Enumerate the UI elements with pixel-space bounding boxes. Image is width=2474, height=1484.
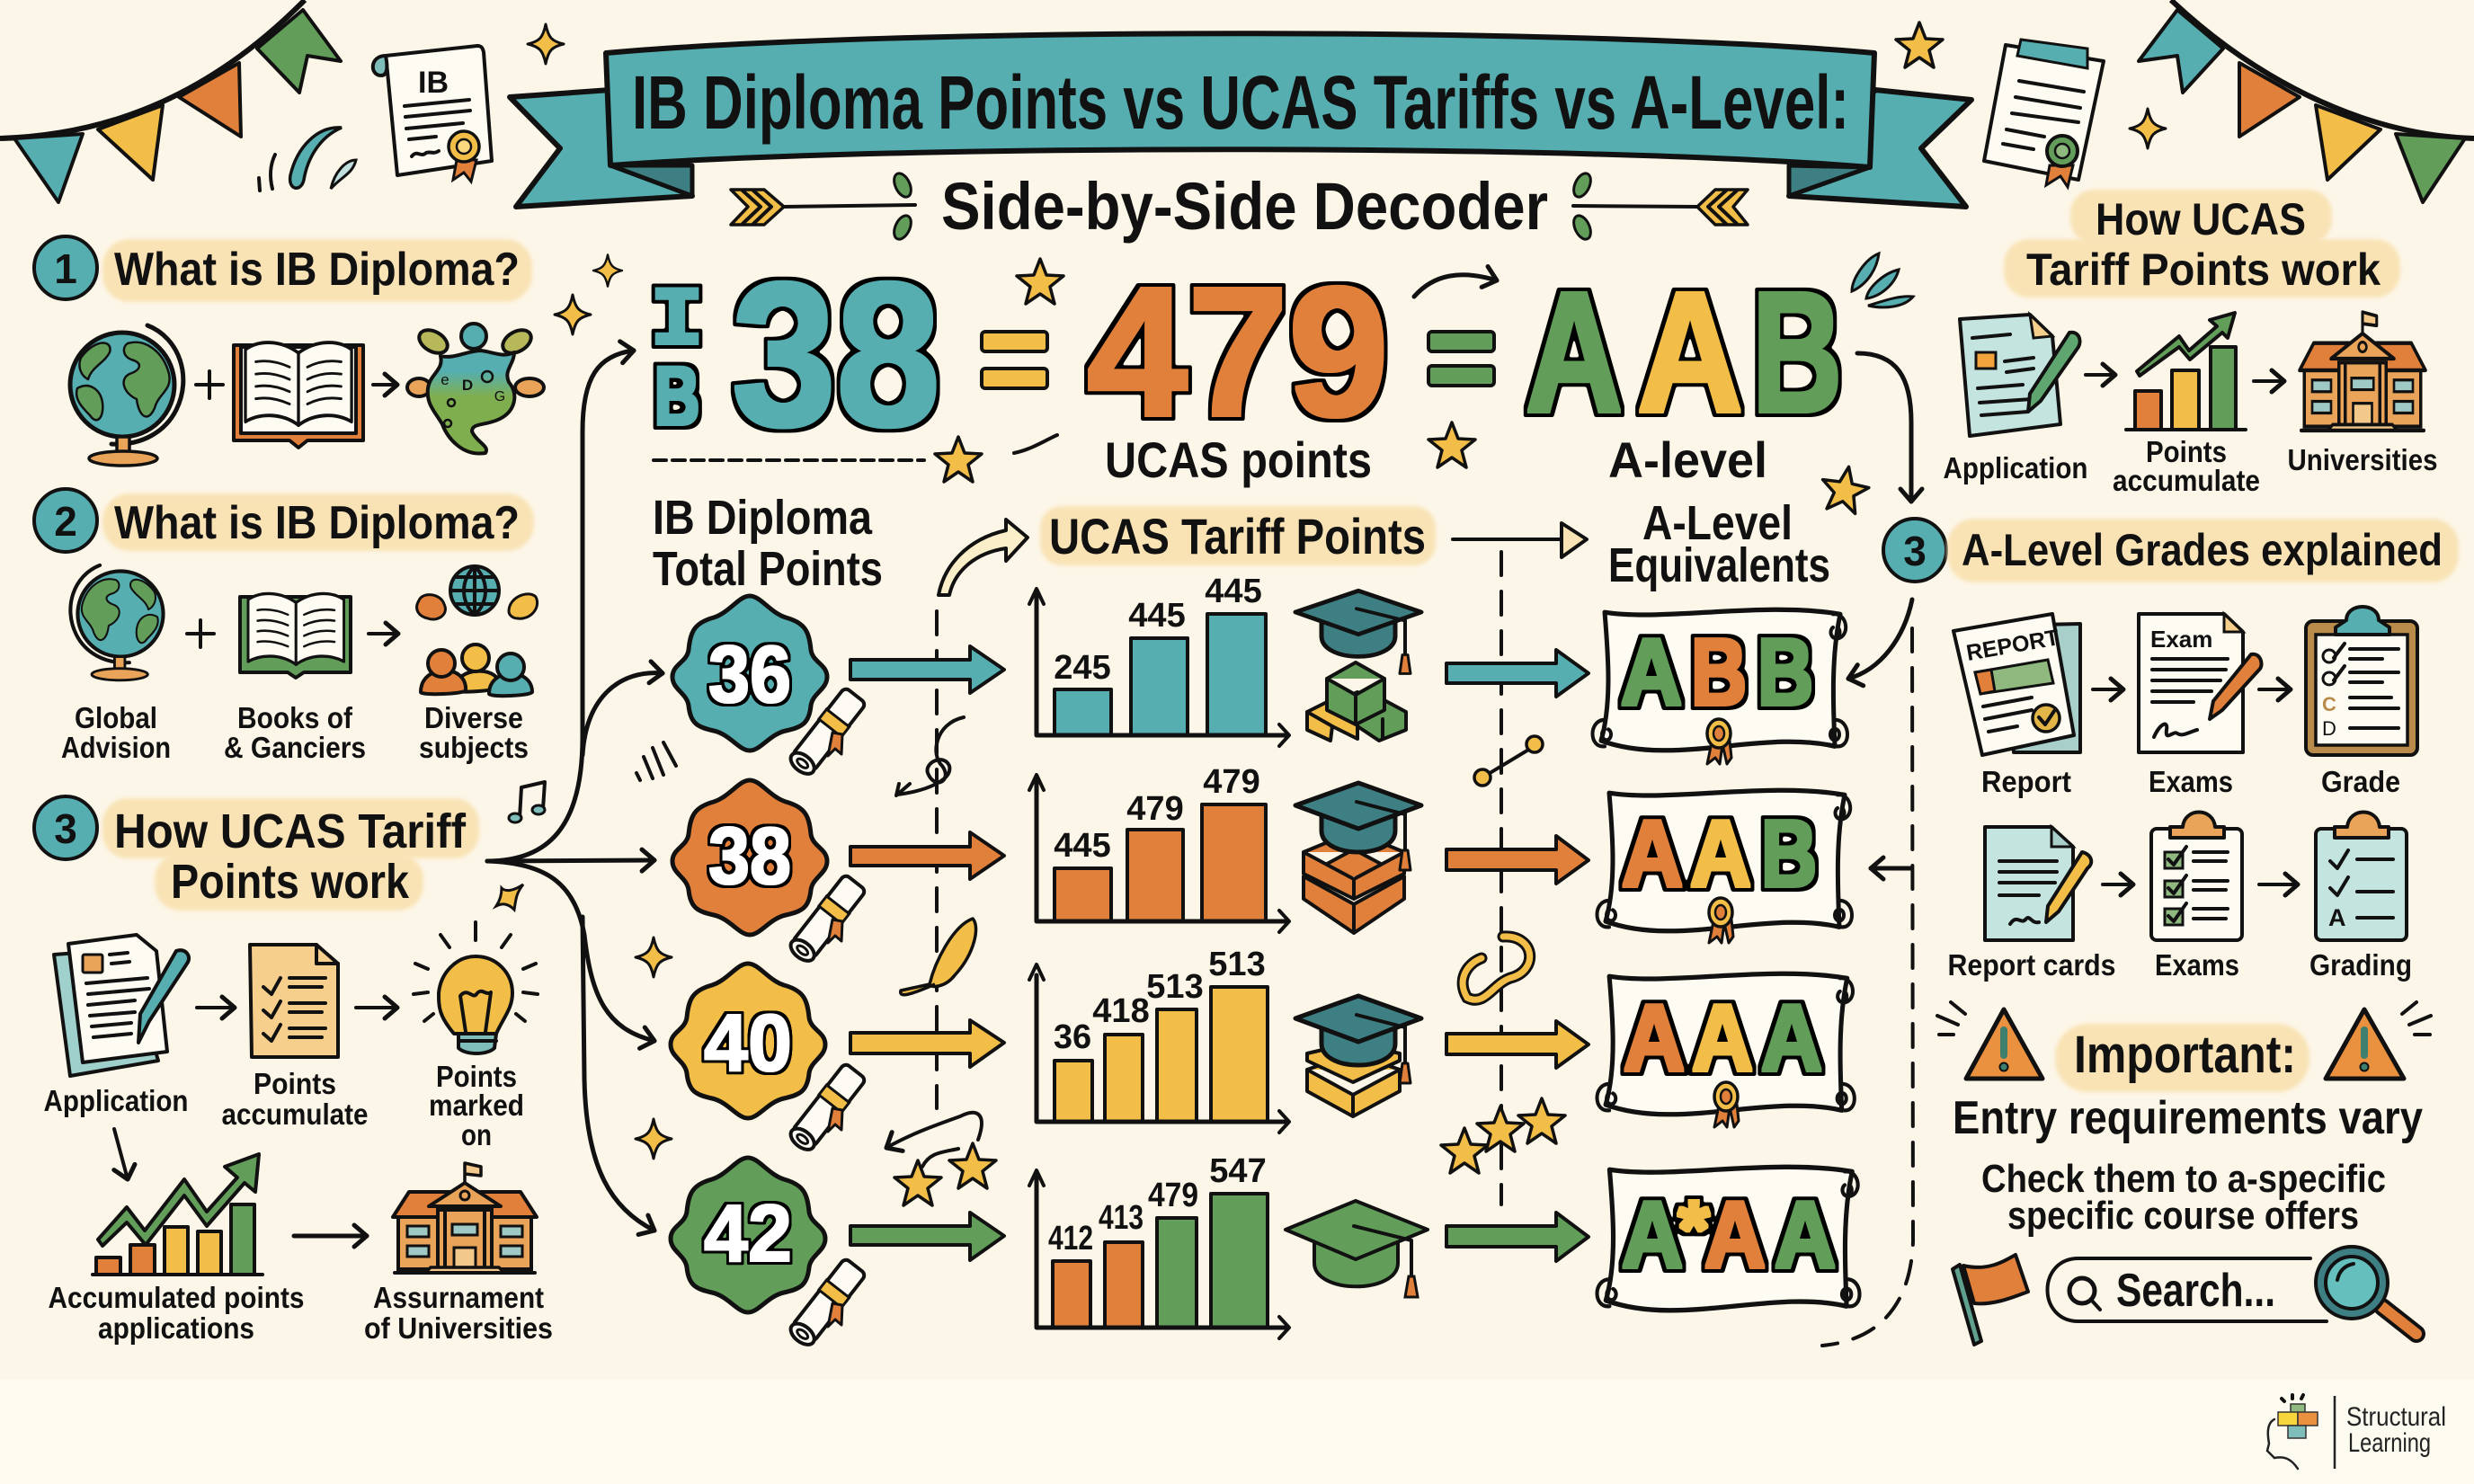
icon: university: [2300, 312, 2425, 431]
logo text: [2346, 1402, 2446, 1458]
arrow: [2259, 883, 2298, 886]
scroll: AAB: A: [1622, 801, 1683, 907]
panel: A-Level Grades explained: [1883, 519, 2459, 982]
label: Points accumulate: [2113, 435, 2260, 497]
text: check them: specific course offers: [2007, 1194, 2359, 1238]
scroll: AAB: B: [1761, 801, 1817, 907]
row: IB 40 → AAA: [671, 946, 1855, 1154]
icon: green cap: [1286, 1201, 1428, 1297]
label: Grading: Grading: [2309, 948, 2412, 982]
equals: green: [1428, 332, 1494, 386]
icon: IB diploma document: IB: [418, 66, 449, 100]
column header: IB Diploma Total Points: Total Points: [653, 542, 883, 596]
label: Points marked on: on: [461, 1118, 492, 1151]
value: AAB: A: [1526, 255, 1623, 449]
value: 479: 479: [1087, 249, 1389, 455]
icon: grading clipboard: [2316, 813, 2407, 940]
text: check them: [1981, 1157, 2386, 1238]
heading: [102, 798, 479, 911]
label: Assurnament of Universities: Assurnament: [373, 1281, 544, 1314]
arrow: [2093, 688, 2123, 691]
bar chart: [1029, 1152, 1289, 1338]
column header: A-Level Equivalents: A-Level: [1642, 496, 1793, 550]
icon: globe: [70, 565, 164, 680]
heading badge 3: [34, 796, 97, 859]
icon: blob: e: [441, 371, 449, 388]
arrow: [356, 1006, 397, 1009]
bar chart: 413: [1099, 1199, 1144, 1237]
icon: application papers: [54, 935, 189, 1076]
scroll: ABB: A: [1621, 619, 1682, 725]
bunting: right: [2139, 0, 2474, 202]
icon: exam paper: Exam: [2150, 626, 2212, 653]
banner left tail: [510, 90, 692, 207]
arrow: [1446, 650, 1589, 697]
search box: [2048, 1258, 2327, 1321]
doodle: burst lines: [636, 742, 676, 780]
arrow: [373, 383, 397, 387]
label: Accumulated points applications: applications: [98, 1311, 254, 1345]
icon: warning left: [1937, 1002, 2042, 1079]
section 3: How UCAS Tariff Points work: [34, 782, 553, 1345]
icon: open book: [234, 342, 363, 448]
icon: exams clipboard: [2151, 813, 2242, 940]
arrows into scrolls from right: [1848, 600, 1912, 868]
scroll: AAA: A: [1624, 985, 1685, 1091]
doodle: quill: [901, 919, 976, 995]
arrow: [2103, 883, 2133, 886]
label: Diverse subjects: subjects: [419, 731, 529, 764]
bunting: left: [0, 0, 341, 202]
arrow: [850, 1213, 1004, 1260]
label: Report cards: Report cards: [1947, 948, 2116, 982]
icon: certificate top right: [1984, 40, 2104, 187]
icon: swoosh: [259, 128, 356, 191]
icon: clipboard grades: [2306, 607, 2417, 755]
scroll: AAB: [1597, 790, 1852, 943]
heading: Important:: [2074, 1026, 2296, 1084]
column header: A-Level Equivalents: Equivalents: [1608, 538, 1830, 592]
arrow: down: [114, 1129, 128, 1179]
label: Application: Application: [43, 1084, 189, 1117]
scroll: AAB: A: [1690, 801, 1751, 907]
logo mark: [2267, 1395, 2318, 1469]
scroll: A*AA: A: [1622, 1182, 1683, 1288]
bar chart: [1029, 573, 1289, 746]
label: Assurnament of Universities: of Universities: [364, 1311, 553, 1345]
bar chart: 412: [1048, 1220, 1093, 1257]
banner folds: [610, 165, 1870, 196]
icon: university: [393, 1163, 537, 1273]
bar chart: 445: [1054, 827, 1111, 865]
heading: Points work: [171, 855, 410, 909]
scroll: AAA: A: [1761, 985, 1822, 1091]
label: Points accumulate: Points: [254, 1067, 336, 1100]
label: Exams: Exams: [2149, 765, 2233, 798]
icon: cap and blocks: [1295, 591, 1421, 741]
doodle: connector: [1482, 746, 1535, 778]
text: check them: Check them to a-specific: [1981, 1157, 2386, 1201]
heading badge 3: 3: [1903, 528, 1927, 574]
label: Books of & Ganciers: [224, 701, 366, 764]
label: Accumulated points applications: Accumulated points: [49, 1281, 304, 1314]
heading: [2004, 190, 2400, 298]
right arrow ornament: [1571, 171, 1748, 242]
arrow: curved yellow to UCAS header: [939, 520, 1028, 595]
chart: accumulated points: [93, 1154, 263, 1275]
badge: 40: [671, 964, 867, 1154]
doodle: sparkles: [636, 937, 672, 977]
bar chart: 513: [1146, 968, 1204, 1006]
label: Points accumulate: accumulate: [2113, 464, 2260, 497]
label: Report: Report: [1981, 765, 2071, 798]
heading badge 3: [1883, 519, 1946, 582]
label: Points accumulate: [221, 1067, 369, 1131]
doodle: stars: [894, 1160, 941, 1205]
heading: What is IB Diploma?: [114, 497, 520, 549]
icon: green book: [240, 593, 351, 678]
icon: flag: [1953, 1255, 2028, 1345]
label: Exams: Exams: [2155, 948, 2239, 982]
label: Global Advision: [61, 701, 171, 764]
scroll: ABB: [1593, 609, 1847, 764]
vertical IB label: [650, 274, 704, 442]
scroll: ABB: B: [1691, 619, 1747, 725]
icon: warning right: [2326, 1002, 2431, 1079]
bar chart: 418: [1092, 992, 1150, 1030]
bar chart: 479: [1126, 790, 1184, 828]
label: Global Advision: Advision: [61, 731, 171, 764]
bar chart: 445: [1205, 573, 1262, 610]
badge: 36: [672, 596, 867, 778]
icon: IB diploma document: [373, 46, 492, 182]
arrow: [2254, 379, 2284, 383]
doodle: curved arrow to left: [886, 1113, 982, 1148]
label: Accumulated points applications: [49, 1281, 304, 1345]
scroll: AAA: [1597, 973, 1855, 1127]
arrow: AAB down to section 3: [1857, 353, 1911, 502]
label: Diverse subjects: Diverse: [424, 701, 523, 734]
doodle: curl arrow: [897, 717, 964, 795]
badge: 42: [671, 1158, 867, 1349]
value: AAB: B: [1752, 255, 1842, 449]
doodle: curl arrowhead: [896, 784, 910, 795]
label: Universities: Universities: [2287, 443, 2438, 476]
title text: IB Diploma Points vs UCAS Tariffs vs A-Level:: [632, 60, 1849, 145]
logo text: Learning: [2348, 1428, 2431, 1458]
banner right tail: [1789, 90, 1971, 207]
decorative stars around equation: [555, 22, 2166, 515]
badge: 40: 40: [704, 999, 792, 1089]
value: AAB: A: [1637, 255, 1743, 449]
heading: Tariff Points work: [2026, 244, 2381, 295]
icon: clipboard grades: D: [2322, 717, 2336, 740]
bar chart: 445: [1128, 597, 1186, 635]
icon: report: REPORT: [1964, 625, 2061, 666]
label: Global Advision: Global: [75, 701, 157, 734]
label: Points marked on: marked: [429, 1089, 524, 1122]
decorative doodles in the middle columns: [636, 717, 1565, 1205]
icon: light bulb: [414, 922, 538, 1053]
label: Books of & Ganciers: & Ganciers: [224, 731, 366, 764]
arrow: [294, 1233, 367, 1239]
arrow: [369, 632, 398, 635]
icon: plus: [187, 620, 214, 647]
badge: 36: 36: [708, 630, 791, 720]
arrow: [1446, 836, 1589, 884]
icon: report card: [1985, 827, 2091, 940]
arrow: [850, 646, 1004, 693]
column header: A-Level Equivalents: [1608, 496, 1830, 592]
label: Points accumulate: Points: [2146, 435, 2227, 468]
label: Points marked on: [429, 1060, 524, 1151]
heading: What is IB Diploma?: [114, 244, 520, 296]
bar chart: [1029, 946, 1289, 1133]
heading badge 2: 2: [54, 498, 77, 545]
label: UCAS points: UCAS points: [1105, 431, 1372, 488]
label: Points marked on: Points: [436, 1060, 517, 1093]
icon: application doc: [1960, 315, 2080, 436]
vertical IB label: I: [650, 274, 704, 369]
icon: checklist: [250, 945, 338, 1057]
bar chart: 547: [1209, 1152, 1267, 1190]
arrow: [197, 1006, 235, 1009]
row: IB 36 → ABB: [672, 573, 1847, 778]
icon: blob: G: [494, 389, 505, 404]
section 2: What is IB Diploma: [34, 489, 538, 764]
icon: chart: [2126, 313, 2246, 430]
value: AAB: [1526, 255, 1842, 449]
badge: 38: [672, 780, 867, 965]
icon: splash marks: [1852, 253, 1913, 307]
subtitle row: [731, 169, 1748, 244]
icon: exam paper: [2139, 614, 2262, 752]
arrow: curved over equals: [1414, 275, 1497, 297]
dashed vertical dividers: [937, 552, 1913, 1346]
bar chart: 36: [1054, 1018, 1091, 1056]
decoration: music note and star: [496, 782, 545, 910]
column header: IB Diploma Total Points: [653, 491, 883, 596]
bar chart: [1029, 763, 1289, 932]
logo: Structural Learning: [2267, 1395, 2446, 1469]
banner main: [606, 33, 1874, 167]
arrow: [850, 1020, 1004, 1067]
icon: cap and books: [1295, 996, 1421, 1116]
value: 38: 38: [732, 241, 940, 469]
flow arrows from left section: [487, 351, 663, 1231]
logo text: Structural: [2346, 1402, 2446, 1432]
vertical IB label: B: [654, 351, 699, 442]
bar chart: 479: [1148, 1177, 1198, 1214]
heading: How UCAS: [2096, 194, 2306, 244]
subtitle: Side-by-Side Decoder: [941, 169, 1548, 244]
label: Application: Application: [1944, 451, 2087, 484]
bar chart: 479: [1203, 763, 1260, 801]
heading badge 2: [34, 489, 97, 552]
arrow: [1446, 1021, 1589, 1068]
scroll: A*AA: [1597, 1167, 1860, 1311]
row: IB 42 → A*AA: [671, 1152, 1860, 1349]
arrow: [2259, 688, 2291, 691]
bar chart: 513: [1208, 946, 1266, 983]
heading badge 3: 3: [54, 805, 77, 852]
icon: plus: [196, 371, 223, 398]
heading badge 1: 1: [54, 245, 77, 292]
column header: UCAS Tariff Points: UCAS Tariff Points: [1049, 508, 1426, 564]
row: IB 38 → AAB: [672, 763, 1852, 965]
icon: cap and books: [1295, 783, 1421, 933]
doodle: hook: [1463, 937, 1530, 1000]
dashed underline and ticks: [654, 435, 1057, 460]
badge: 38: 38: [708, 812, 791, 902]
label: A-level: A-level: [1608, 431, 1767, 488]
scroll: A*AA: *: [1678, 1185, 1710, 1275]
icon: diverse people: [417, 566, 538, 696]
heading: How UCAS Tariff: [114, 804, 467, 858]
icon: blob: D: [462, 377, 473, 394]
icon: blob: [407, 324, 544, 454]
icon: clipboard grades: C: [2322, 693, 2336, 715]
arrow: [1446, 1213, 1589, 1261]
left arrow ornament: [731, 171, 915, 242]
label: Assurnament of Universities: [364, 1281, 553, 1345]
arrow: to A-Level Equivalents: [1453, 523, 1587, 557]
doodle: star trio: [1441, 1128, 1488, 1173]
panel: Important callout: [1937, 1002, 2431, 1345]
section 1: What is IB Diploma: [34, 236, 544, 466]
title banner: [510, 33, 1971, 207]
scroll: ABB: B: [1758, 619, 1813, 725]
scroll: A*AA: A: [1704, 1182, 1766, 1288]
label: Grade: Grade: [2321, 765, 2400, 798]
arrow: [2086, 373, 2115, 377]
icon: grading clipboard: A: [2328, 904, 2346, 931]
column header: IB Diploma Total Points: IB Diploma: [653, 491, 873, 545]
icon: magnifier: [2316, 1247, 2416, 1334]
star: top left: [528, 24, 564, 64]
icon: globe: [70, 325, 183, 466]
badge: 42: 42: [704, 1189, 792, 1279]
panel: How UCAS Tariff Points work (right): [1944, 190, 2438, 497]
label: Books of & Ganciers: Books of: [237, 701, 353, 734]
icon: report: [1953, 614, 2080, 755]
heading badge 1: [34, 236, 97, 299]
scroll: A*AA: A: [1775, 1182, 1836, 1288]
equals: yellow: [982, 332, 1047, 388]
label: Points accumulate: accumulate: [221, 1097, 369, 1131]
equation: IB 38 = 479 = AAB: [650, 241, 1842, 488]
bar chart: 245: [1054, 649, 1111, 687]
logo divider: [2334, 1396, 2336, 1469]
arrow: [850, 832, 1004, 879]
scroll: AAA: A: [1692, 985, 1753, 1091]
search box: Search...: [2116, 1265, 2275, 1317]
label: Diverse subjects: [419, 701, 529, 764]
